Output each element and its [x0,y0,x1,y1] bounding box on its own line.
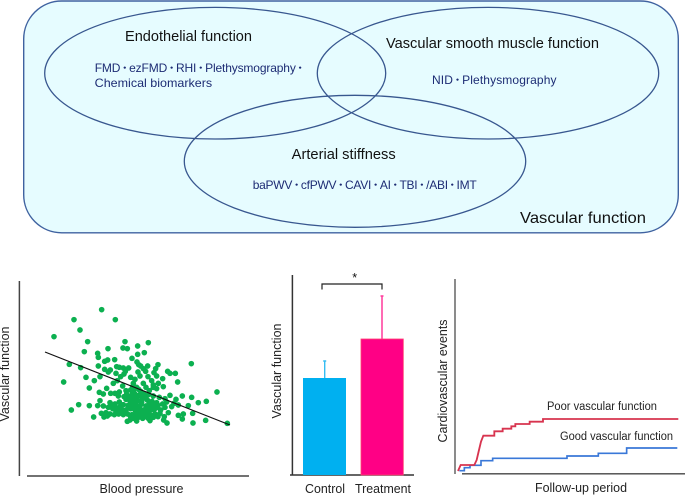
text: arterial stiffness measures: ・ [371,180,380,190]
regression line [45,352,230,425]
text: endothelial measures: ・ [296,63,305,73]
text: arterial stiffness measures: IMT [457,178,477,192]
text: arterial stiffness measures: TBI [399,178,418,192]
text: endothelial measures: RHI [176,61,196,75]
text: endothelial measures: Chemical biomarkers [95,76,212,90]
label: treatment: Treatment [355,482,412,496]
text: endothelial measures [95,61,305,90]
curve: good vascular function [459,448,677,471]
label: vascular function: Vascular function [520,210,646,227]
text: arterial stiffness measures: ・ [336,180,345,190]
significance star: * [352,271,357,285]
text: arterial stiffness measures: /ABI [426,178,448,192]
label: control: Control [305,482,345,496]
heading: vascular smooth muscle function: Vascular smooth muscle function [386,36,599,52]
significance bracket [322,284,382,290]
text: smooth muscle measures: ・ [453,75,462,85]
text: arterial stiffness measures: ・ [417,180,426,190]
text: endothelial measures: Plethysmography [205,61,296,75]
text: arterial stiffness measures: AI [380,178,391,192]
y axis label: Vascular function [270,323,284,418]
bar: control with error bar [303,361,346,475]
heading: endothelial function: Endothelial function [125,29,252,45]
panel background [24,1,678,233]
text: endothelial measures: ・ [120,63,129,73]
label: good vascular function: Good vascular function [560,431,673,443]
heading: arterial stiffness: Arterial stiffness [292,147,396,163]
text: endothelial measures: ezFMD [129,61,168,75]
text: arterial stiffness measures: CAVI [345,178,371,192]
ellipses: three overlapping function sets [45,7,659,227]
x axis label: Blood pressure [100,482,184,496]
scatter points [54,310,227,423]
text: endothelial measures: FMD [95,61,120,75]
text: smooth muscle measures: NID [432,73,453,87]
curve: poor vascular function [458,419,678,471]
text: arterial stiffness measures: cfPWV [301,178,337,192]
x axis label: Follow-up period [535,481,627,495]
text: arterial stiffness measures: baPWV [253,178,292,192]
axes [19,281,249,476]
axes [290,275,414,475]
text: arterial stiffness measures: ・ [292,180,301,190]
text: endothelial measures: ・ [196,63,205,73]
chart: cardiovascular events over follow-up [436,279,685,495]
y axis label: Cardiovascular events [436,320,450,442]
axes [454,279,456,474]
text: endothelial measures: ・ [167,63,176,73]
panel: vascular function diagram [24,1,678,233]
text: arterial stiffness measures: ・ [391,180,400,190]
chart: scatter plot of vascular function vs blood pressure [0,281,249,496]
label: poor vascular function: Poor vascular function [547,401,657,413]
bar: treatment with error bar [361,296,403,475]
text: smooth muscle measures: Plethysmography [462,73,556,87]
chart: bar chart control vs treatment [270,271,414,496]
text: arterial stiffness measures: ・ [448,180,457,190]
